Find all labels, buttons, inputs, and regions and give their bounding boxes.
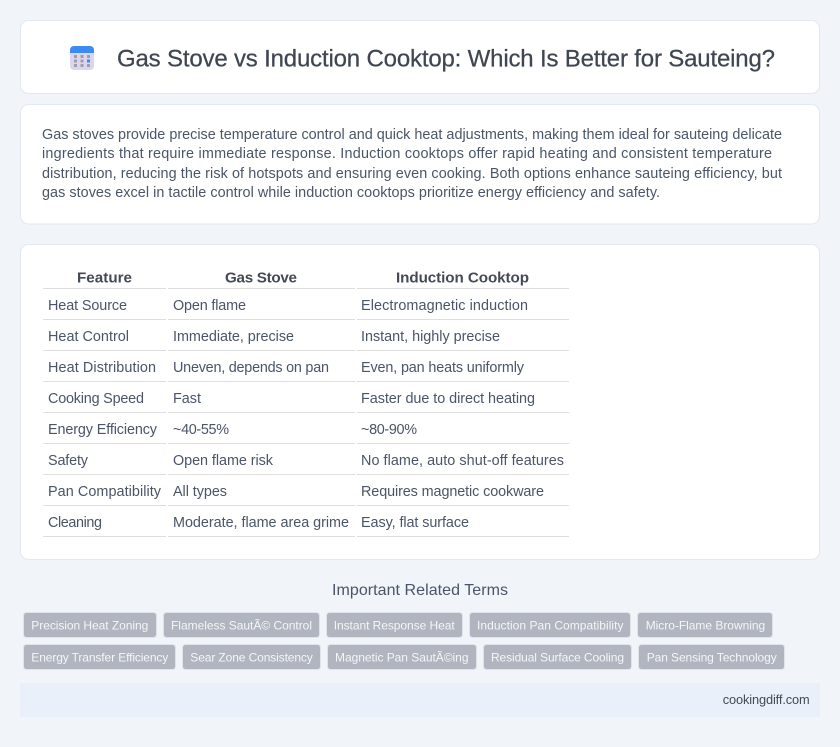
text block: summary paragraph: distribution, reducing the risk of hotspots and ensuring even cooking. Both options enhance sauteing efficiency, but xyxy=(42,166,782,182)
row: energy efficiency: Energy Efficiency xyxy=(48,422,158,438)
related terms chips: Flameless SautÃ© Control xyxy=(171,618,312,632)
row: safety xyxy=(48,453,564,469)
row: safety: Safety xyxy=(48,453,89,469)
related terms chips: Induction Pan Compatibility xyxy=(477,618,624,632)
panel: summary xyxy=(20,104,820,224)
footer xyxy=(20,683,820,717)
heading: important related terms: Important Related Terms xyxy=(332,582,508,599)
row: heat distribution: Heat Distribution xyxy=(48,360,156,376)
row: safety: Open flame risk xyxy=(173,453,274,469)
title: Gas Stove vs Induction Cooktop: Which Is Better for Sauteing? xyxy=(117,46,775,73)
row: energy efficiency: ~40-55% xyxy=(173,422,229,438)
row: pan compatibility: All types xyxy=(173,484,227,500)
row: safety: No flame, auto shut-off features xyxy=(361,453,564,469)
row: energy efficiency xyxy=(48,422,417,438)
row: heat distribution: Uneven, depends on pan xyxy=(173,360,329,376)
text block: summary paragraph: gas stoves excel in tactile control while induction cooktops prioritize energy efficiency and safety. xyxy=(42,185,660,201)
related terms chips: Precision Heat Zoning xyxy=(31,618,148,632)
row: heat control: Heat Control xyxy=(48,329,129,345)
panel: header xyxy=(20,20,820,94)
related terms chips: Sear Zone Consistency xyxy=(190,650,313,664)
related terms chips: Instant Response Heat xyxy=(334,618,455,632)
footer: cookingdiff.com xyxy=(723,692,810,707)
related terms chips: Residual Surface Cooling xyxy=(491,650,624,664)
row: cooking speed: Cooking Speed xyxy=(48,391,144,407)
row: cooking speed: Faster due to direct heating xyxy=(361,391,535,407)
table header: Induction Cooktop xyxy=(396,270,529,286)
row: energy efficiency: ~80-90% xyxy=(361,422,417,438)
table header xyxy=(77,270,529,286)
row: heat source xyxy=(48,298,528,314)
row: pan compatibility xyxy=(48,484,544,500)
row: pan compatibility: Requires magnetic cookware xyxy=(361,484,544,500)
row: cleaning: Easy, flat surface xyxy=(361,515,469,531)
row: heat control xyxy=(48,329,500,345)
text block: summary paragraph: ingredients that require immediate response. Induction cooktops offer rapid heating and consistent temperature xyxy=(42,146,772,162)
text block: summary paragraph xyxy=(42,127,782,201)
related terms chips: Energy Transfer Efficiency xyxy=(31,650,168,664)
related terms chips: Magnetic Pan SautÃ©ing xyxy=(335,650,468,664)
panel: comparison table xyxy=(20,244,820,560)
row: heat control: Immediate, precise xyxy=(173,329,294,345)
row: heat source: Open flame xyxy=(173,298,246,314)
row: heat source: Heat Source xyxy=(48,298,127,314)
row: cleaning: Cleaning xyxy=(48,515,102,531)
row: heat distribution xyxy=(48,360,525,376)
row: cleaning xyxy=(48,515,469,531)
row: heat distribution: Even, pan heats uniformly xyxy=(361,360,525,376)
related terms chips: Micro-Flame Browning xyxy=(646,618,765,632)
row: cooking speed: Fast xyxy=(173,391,201,407)
text block: summary paragraph: Gas stoves provide precise temperature control and quick heat adjustments, making them ideal for sauteing delicate xyxy=(42,127,782,143)
icon: calendar xyxy=(70,46,94,70)
row: cooking speed xyxy=(48,391,535,407)
related terms chips xyxy=(24,612,784,670)
table header: Feature xyxy=(77,270,132,286)
related terms chips: Pan Sensing Technology xyxy=(647,650,777,664)
row: heat source: Electromagnetic induction xyxy=(361,298,528,314)
row: cleaning: Moderate, flame area grime xyxy=(173,515,349,531)
row: pan compatibility: Pan Compatibility xyxy=(48,484,162,500)
row: heat control: Instant, highly precise xyxy=(361,329,500,345)
table header: Gas Stove xyxy=(225,270,297,286)
